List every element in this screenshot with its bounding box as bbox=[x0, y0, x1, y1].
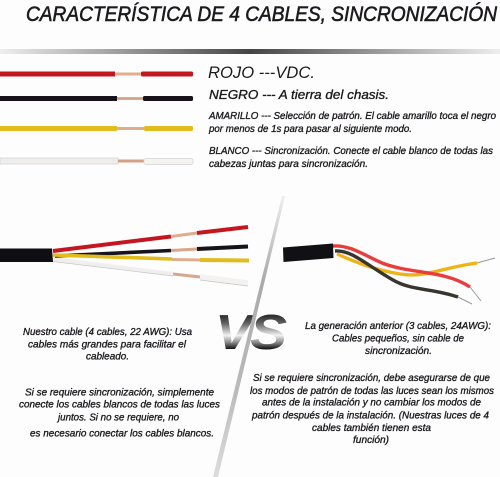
white description bbox=[209, 145, 494, 170]
text block: our cable: es necesario conectar los cables blancos. bbox=[30, 428, 214, 440]
white description: cabezas juntas para sincronización. bbox=[209, 158, 368, 170]
text block: our cable: cableado. bbox=[86, 350, 129, 362]
black jacket bbox=[283, 244, 334, 262]
yellow conductor bbox=[337, 254, 495, 275]
black jacket bbox=[0, 248, 53, 262]
text block: previous generation: patrón después de la instalación. (Nuestras luces de 4 bbox=[251, 410, 489, 422]
red conductor bbox=[53, 227, 248, 251]
text block: previous generation: cables también tienen esta bbox=[312, 422, 431, 434]
yellow conductor bbox=[53, 255, 249, 260]
image: 4-wire cable bbox=[0, 227, 249, 286]
white conductor bbox=[53, 259, 248, 286]
text block: our cable: conecte los cables blancos de todas las luces bbox=[19, 398, 221, 410]
black label: NEGRO --- A tierra del chasis. bbox=[209, 87, 389, 102]
text block: previous generation: Cables pequeños, sin cable de bbox=[332, 332, 464, 344]
VS emblem: V bbox=[215, 306, 257, 360]
text block: our cable: Nuestro cable (4 cables, 22 AWG): Usa bbox=[23, 326, 192, 338]
text block: our cable bbox=[19, 326, 221, 440]
black conductor bbox=[55, 246, 248, 256]
text block: previous generation: función) bbox=[353, 434, 389, 446]
black wire bbox=[0, 96, 193, 101]
white wire bbox=[0, 158, 193, 164]
yellow wire bbox=[0, 126, 193, 131]
gradient divider bar bbox=[0, 49, 500, 54]
VS emblem: S bbox=[250, 306, 287, 360]
text block: our cable: Si se requiere sincronización, simplemente bbox=[25, 386, 214, 398]
text block: previous generation: Si se requiere sincronización, debe asegurarse de que bbox=[253, 372, 490, 384]
yellow description: por menos de 1s para pasar al siguiente modo. bbox=[208, 123, 412, 135]
text block: our cable: cables más grandes para facilitar el bbox=[28, 338, 187, 350]
text block: previous generation: antes de la instalación y no cambiar los modos de bbox=[262, 396, 481, 408]
text block: our cable: juntos. Si no se requiere, no bbox=[56, 412, 179, 424]
red conductor bbox=[333, 246, 481, 301]
diagonal VS divider bbox=[213, 196, 285, 477]
red label: ROJO ---VDC. bbox=[208, 63, 315, 82]
VS emblem bbox=[215, 306, 287, 360]
text block: previous generation bbox=[250, 320, 495, 446]
yellow description bbox=[208, 110, 496, 135]
text block: previous generation: sincronización. bbox=[365, 345, 432, 357]
panel: wire colour descriptions bbox=[208, 63, 496, 170]
black conductor bbox=[335, 251, 472, 304]
red wire bbox=[0, 72, 193, 76]
panel: wire samples bbox=[0, 72, 193, 164]
text block: previous generation: La generación anterior (3 cables, 24AWG): bbox=[305, 320, 491, 332]
image: 3-wire cable bbox=[283, 244, 495, 304]
